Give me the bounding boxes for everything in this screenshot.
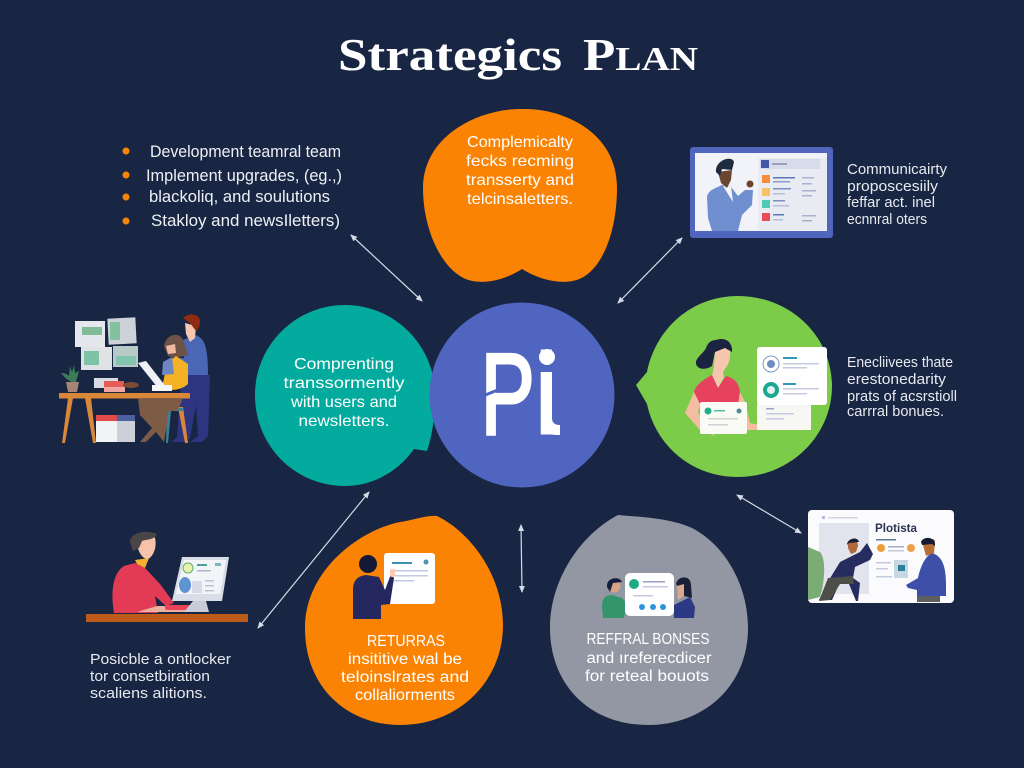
text: bottom left description xyxy=(90,651,231,702)
panel: bottom orange bubble: collaliorments xyxy=(355,687,455,704)
title: PLAN xyxy=(583,29,699,80)
text: communicating description: proposcesiily xyxy=(847,179,939,195)
panel: centre blue circle with logo: i xyxy=(534,329,559,459)
text: communicating description: Communicairty xyxy=(847,162,948,178)
text: communicating description: feffar act. inel xyxy=(847,195,935,211)
arrow: computer to teal xyxy=(258,492,369,628)
icon: woman with cards on green bubble xyxy=(685,339,827,436)
panel: teal bubble: transsormently xyxy=(284,375,404,392)
panel: centre blue circle with logo: P xyxy=(481,330,535,459)
panel: bottom grey bubble xyxy=(550,515,748,725)
panel: teal bubble: Comprenting xyxy=(294,356,394,373)
text: bottom left description: tor consetbiration xyxy=(90,668,210,685)
text: bottom left description: Posicble a ontlocker xyxy=(90,651,231,668)
panel: top orange bubble: fecks recming xyxy=(466,153,574,170)
text: bottom left description: scaliens alitions. xyxy=(90,685,207,702)
illustration: man at computer xyxy=(86,532,248,622)
bullet list xyxy=(122,143,342,230)
panel: green bubble xyxy=(636,296,832,477)
panel: top orange bubble xyxy=(423,109,617,282)
title: Strategics xyxy=(338,29,562,80)
panel: bottom grey bubble: and ıreferecdicer xyxy=(586,650,712,667)
arrow: presenter to centre xyxy=(618,238,682,303)
panel: centre blue circle with logo xyxy=(430,302,614,488)
illustration: presenter screen xyxy=(690,147,833,238)
text: green bubble description: erestonedarity xyxy=(847,372,947,388)
panel: teal bubble xyxy=(255,305,435,486)
bullet list: Development teamral team xyxy=(150,143,341,161)
arrow: bullet list to centre xyxy=(351,235,422,301)
illustration: desk team xyxy=(59,314,210,443)
bullet list: blackoliq, and soulutions xyxy=(149,188,330,206)
icon: man with document on bottom orange bubble xyxy=(353,553,435,619)
panel: bottom orange bubble: teloinslrates and xyxy=(341,669,469,686)
text: communicating description: ecnnral oters xyxy=(847,212,927,228)
text: green bubble description: prats of acsrstioll xyxy=(847,389,957,405)
panel: bottom orange bubble: insititive wal be xyxy=(348,651,462,668)
illustration: plotista card: Plotista xyxy=(875,521,917,535)
icon: two people with card on grey bubble xyxy=(602,573,695,618)
panel: teal bubble: newsletters. xyxy=(298,413,390,430)
arrow: green to plotista xyxy=(737,495,801,533)
panel: bottom orange bubble xyxy=(305,516,503,725)
panel: bottom grey bubble: for reteal bouots xyxy=(585,668,709,685)
panel: top orange bubble: transserty and xyxy=(466,172,574,189)
panel: top orange bubble: Complemicalty xyxy=(467,134,573,151)
bullet list: Stakloy and newsIletters) xyxy=(151,212,340,230)
panel: teal bubble: with users and xyxy=(290,394,397,411)
arrow: centre to bottom xyxy=(521,525,522,592)
bullet list: Implement upgrades, (eg.,) xyxy=(146,167,342,185)
text: communicating description xyxy=(847,162,948,228)
text: green bubble description xyxy=(847,355,957,420)
title xyxy=(338,29,699,80)
illustration: plotista card xyxy=(808,510,954,603)
text: green bubble description: Enecliivees thate xyxy=(847,355,953,371)
panel: bottom grey bubble: REFFRAL BONSES xyxy=(586,631,710,648)
text: green bubble description: carrral bonues. xyxy=(847,404,944,420)
panel: top orange bubble: telcinsaletters. xyxy=(467,191,573,208)
panel: bottom orange bubble: RETURRAS xyxy=(367,633,445,650)
